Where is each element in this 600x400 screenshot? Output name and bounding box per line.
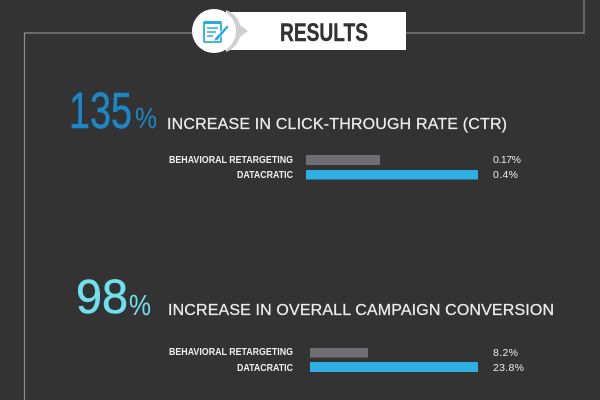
- icon: notepad and pencil: [204, 21, 229, 42]
- bar chart: campaign conversion: DATACRATIC: [237, 363, 293, 374]
- stat: 98 percent: 98: [76, 271, 128, 324]
- bar chart: click-through rate: BEHAVIORAL RETARGETING: [169, 155, 293, 166]
- heading: click-through rate: INCREASE IN CLICK-THROUGH RATE (CTR): [167, 116, 507, 133]
- bar chart: campaign conversion: [169, 347, 524, 374]
- stat: 135 percent: 135: [69, 82, 132, 139]
- bar chart: click-through rate: [169, 154, 521, 181]
- bar chart: campaign conversion: BEHAVIORAL RETARGETING: [169, 347, 293, 358]
- bar chart: click-through rate: 0.17%: [493, 154, 521, 166]
- bar chart: campaign conversion: 23.8%: [493, 362, 524, 374]
- section header: results: [192, 9, 406, 53]
- heading: campaign conversion: INCREASE IN OVERALL CAMPAIGN CONVERSION: [168, 302, 554, 319]
- stat: 135 percent: %: [135, 103, 157, 135]
- bar chart: click-through rate: DATACRATIC: [237, 170, 293, 181]
- stat: 98 percent: %: [129, 290, 151, 322]
- bar chart: campaign conversion: 8.2%: [493, 347, 518, 359]
- bar chart: click-through rate: 0.4%: [493, 169, 518, 181]
- heading: results: RESULTS: [280, 19, 368, 47]
